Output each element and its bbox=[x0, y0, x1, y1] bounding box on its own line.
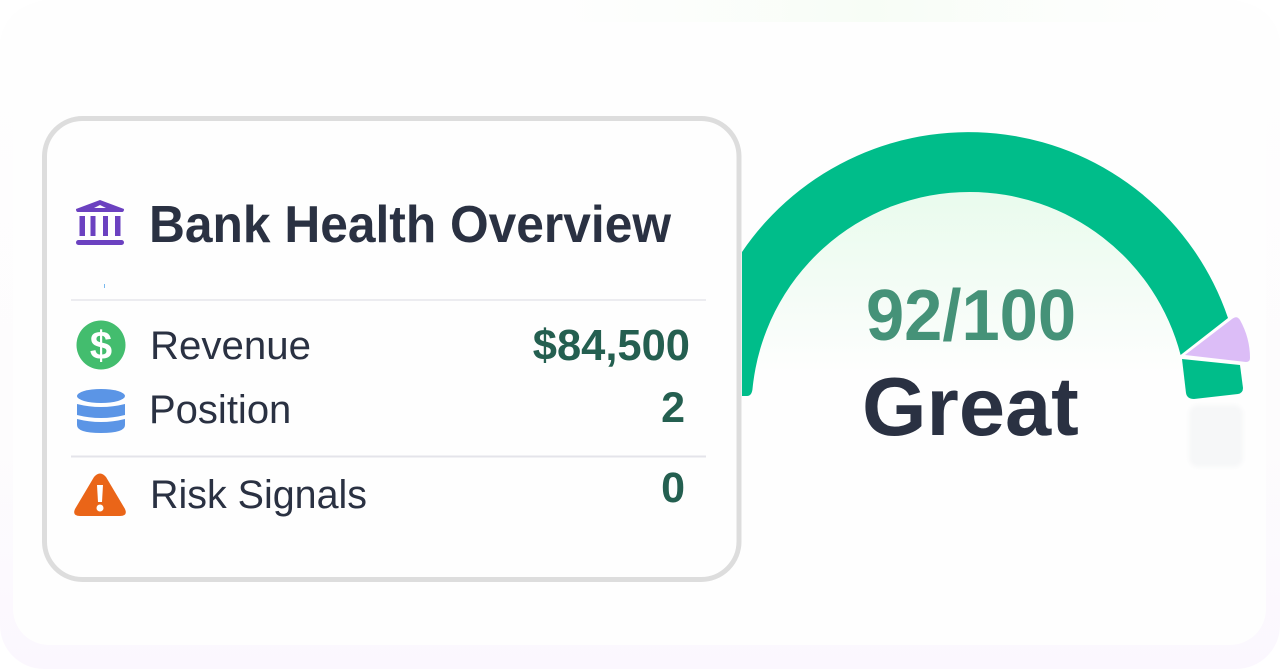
heading: Bank Health Overview bbox=[149, 196, 672, 254]
revenue label: Revenue bbox=[150, 324, 311, 368]
small mark bbox=[104, 284, 105, 288]
position value: 2 bbox=[661, 384, 685, 432]
position label: Position bbox=[149, 388, 291, 432]
row: risk signals bbox=[74, 464, 685, 517]
panel: gauge bbox=[742, 132, 1250, 467]
row: revenue bbox=[76, 320, 690, 370]
icon: database bbox=[77, 389, 125, 433]
icon: bank bbox=[76, 200, 124, 245]
row: position bbox=[77, 384, 685, 433]
gauge ghost segment bbox=[1189, 405, 1243, 467]
gauge inner glow bbox=[752, 192, 1188, 410]
score: 92/100 bbox=[866, 276, 1076, 356]
gauge purple pointer wedge bbox=[1185, 317, 1250, 362]
icon: dollar: $ bbox=[90, 324, 112, 368]
rating: Great bbox=[862, 360, 1079, 453]
risk value: 0 bbox=[661, 464, 685, 512]
gauge lower green segment bbox=[1182, 359, 1243, 399]
revenue value: $84,500 bbox=[533, 322, 690, 370]
gauge green arc bbox=[742, 132, 1228, 396]
panel: bank health card bbox=[44, 118, 739, 580]
icon: dollar bbox=[76, 320, 126, 370]
risk label: Risk Signals bbox=[150, 473, 367, 517]
icon: warning triangle bbox=[74, 474, 126, 516]
